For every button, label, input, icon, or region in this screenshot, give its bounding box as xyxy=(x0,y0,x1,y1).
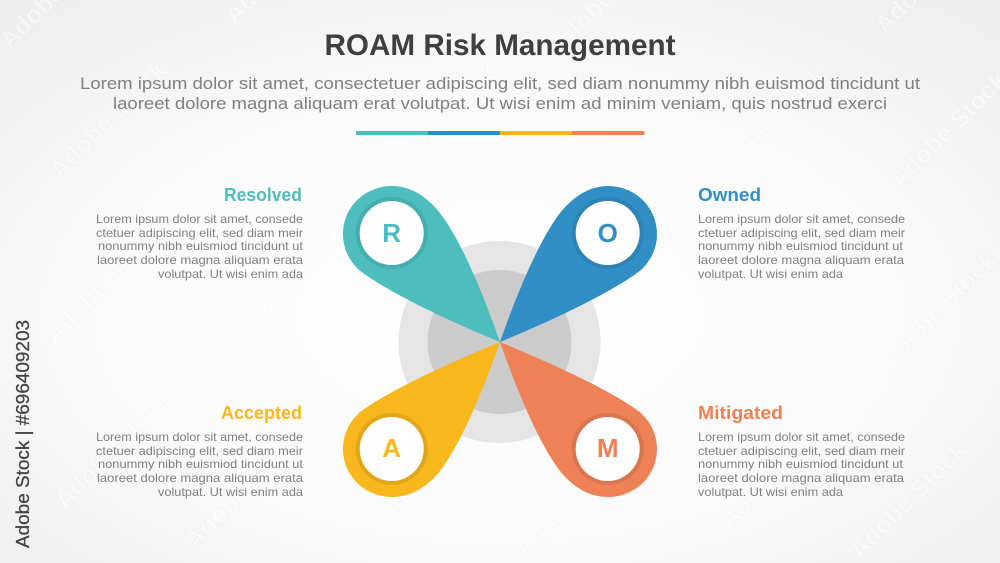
watermark pattern: Adobe Stock xyxy=(179,426,307,554)
central concentric circles xyxy=(398,241,600,443)
watermark pattern: Adobe Stock xyxy=(714,406,842,534)
subtitle: laoreet dolore magna aliquam erat volutpat. Ut wisi enim ad minim veniam, quis nostrud exerci xyxy=(113,94,887,113)
watermark pattern: Adobe Stock xyxy=(374,56,502,184)
text block: Accepted: laoreet dolore magna aliquam erata xyxy=(97,471,303,485)
petal: M: M xyxy=(597,433,619,463)
watermark pattern: Adobe Stock xyxy=(704,61,832,189)
text block: Accepted: Lorem ipsum dolor sit amet, consede xyxy=(96,430,303,444)
petal: O: O xyxy=(598,218,618,248)
text block: Mitigated: Lorem ipsum dolor sit amet, consede xyxy=(698,430,905,444)
text block: Resolved xyxy=(96,212,304,281)
watermark pattern: Adobe Stock xyxy=(39,221,167,349)
text block: Owned: nonummy nibh euismiod tincidunt ut xyxy=(698,239,904,253)
petal: M xyxy=(500,342,657,497)
text block: Owned: ctetuer adipiscing elit, sed diam meir xyxy=(698,226,905,240)
watermark pattern: Adobe Stock xyxy=(844,436,972,563)
title: ROAM Risk Management xyxy=(324,29,676,62)
watermark pattern: Adobe Stock xyxy=(214,226,342,354)
watermark pattern: Adobe Stock xyxy=(49,386,177,514)
heading: Mitigated: Mitigated xyxy=(698,403,783,423)
petal: A xyxy=(343,342,500,497)
text block: Mitigated: nonummy nibh euismiod tincidunt ut xyxy=(698,457,904,471)
text block: Resolved: Lorem ipsum dolor sit amet, consede xyxy=(96,212,303,226)
watermark pattern: Adobe Stock xyxy=(874,246,1000,374)
text block: Accepted: nonummy nibh euismiod tincidunt ut xyxy=(98,457,304,471)
divider: four colour bar xyxy=(356,131,644,135)
text block: Mitigated: volutpat. Ut wisi enim ada xyxy=(698,485,843,499)
subtitle: Lorem ipsum dolor sit amet, consectetuer adipiscing elit, sed diam nonummy nibh euismod tincidunt ut xyxy=(80,74,920,93)
petal: A: A xyxy=(382,433,401,463)
watermark pattern: Adobe Stock xyxy=(539,226,667,354)
text block: Resolved: laoreet dolore magna aliquam erata xyxy=(97,253,303,267)
stock id label: Adobe Stock | #696409203 xyxy=(13,320,33,548)
text block: Mitigated: ctetuer adipiscing elit, sed diam meir xyxy=(698,444,905,458)
text block: Mitigated xyxy=(698,430,905,499)
watermark pattern: Adobe Stock xyxy=(44,56,172,184)
petal: O xyxy=(500,186,657,342)
text block: Owned xyxy=(698,212,905,281)
text block: Accepted: ctetuer adipiscing elit, sed diam meir xyxy=(96,444,303,458)
text block: Owned: volutpat. Ut wisi enim ada xyxy=(698,267,843,281)
text block: Resolved: nonummy nibh euismiod tincidunt ut xyxy=(98,239,304,253)
heading: Resolved: Resolved xyxy=(224,185,302,205)
text block: Owned: Lorem ipsum dolor sit amet, consede xyxy=(698,212,905,226)
text block: Resolved: volutpat. Ut wisi enim ada xyxy=(158,267,303,281)
text block: Mitigated: laoreet dolore magna aliquam erata xyxy=(698,471,904,485)
heading: Accepted: Accepted xyxy=(221,403,302,423)
text block: Accepted xyxy=(96,430,304,499)
petal: R xyxy=(343,186,500,342)
text block: Resolved: ctetuer adipiscing elit, sed diam meir xyxy=(96,226,303,240)
subtitle xyxy=(80,74,920,113)
text block: Owned: laoreet dolore magna aliquam erata xyxy=(698,253,904,267)
petal: R: R xyxy=(382,218,401,248)
text block: Accepted: volutpat. Ut wisi enim ada xyxy=(158,485,303,499)
watermark pattern: Adobe Stock xyxy=(379,396,507,524)
watermark pattern: Adobe Stock xyxy=(509,436,637,563)
heading: Owned: Owned xyxy=(698,185,761,205)
